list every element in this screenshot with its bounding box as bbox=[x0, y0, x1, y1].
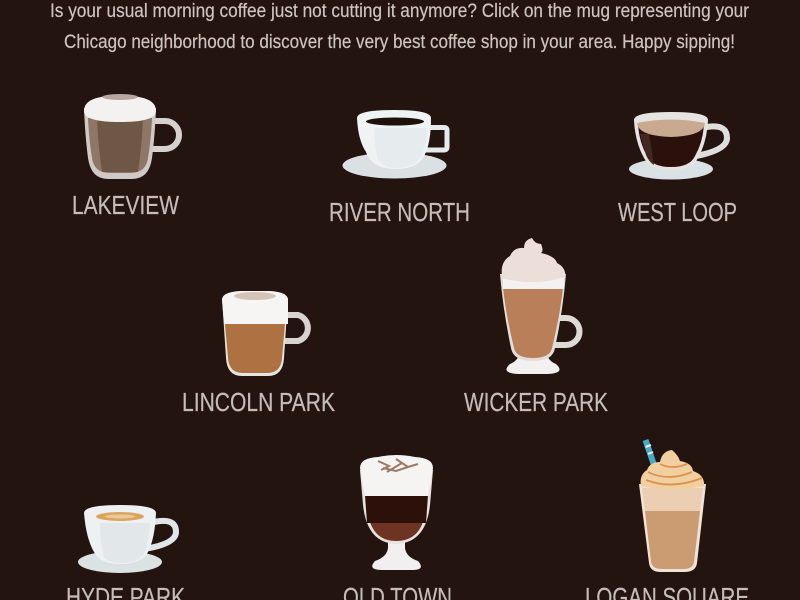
glass bbox=[360, 470, 433, 544]
saucer bbox=[629, 158, 713, 180]
milk layer bbox=[642, 488, 703, 511]
foam bbox=[84, 94, 156, 122]
crema bbox=[637, 120, 705, 137]
cup bbox=[357, 110, 431, 169]
stem and foot bbox=[372, 538, 421, 570]
coffee bbox=[638, 124, 704, 167]
glass bbox=[634, 112, 708, 170]
chocolate drizzle bbox=[378, 459, 418, 472]
saucer bbox=[78, 551, 162, 573]
whipped cream with caramel bbox=[641, 450, 704, 490]
whipped cream bbox=[502, 238, 565, 284]
foam bbox=[222, 291, 288, 324]
dark coffee bbox=[365, 495, 428, 541]
mug: Logan Square bbox=[639, 440, 706, 572]
handle bbox=[553, 318, 580, 345]
saucer bbox=[342, 152, 446, 178]
glass bbox=[500, 274, 566, 361]
foam bbox=[360, 455, 433, 496]
handle bbox=[420, 128, 447, 150]
label: Lakeview: LAKEVIEW bbox=[72, 192, 179, 220]
coffee bbox=[503, 288, 563, 358]
handle bbox=[282, 315, 308, 341]
mug: River North bbox=[342, 110, 447, 178]
cocoa dust bbox=[102, 94, 138, 100]
label: Lincoln Park: LINCOLN PARK bbox=[182, 389, 335, 417]
caramel swirls bbox=[646, 464, 702, 485]
coffee bbox=[88, 118, 152, 173]
cup bbox=[84, 505, 156, 564]
coffee bbox=[645, 511, 700, 569]
cocoa dust bbox=[234, 292, 276, 300]
label: Wicker Park: WICKER PARK bbox=[464, 389, 608, 417]
label: West Loop: WEST LOOP bbox=[618, 199, 737, 227]
foot bbox=[506, 352, 560, 374]
glass bbox=[84, 108, 156, 179]
coffee bbox=[366, 118, 424, 126]
label: River North: RIVER NORTH bbox=[329, 199, 470, 227]
mug: Hyde Park bbox=[78, 505, 176, 573]
mug: West Loop bbox=[629, 112, 727, 180]
mug: Lakeview bbox=[84, 94, 179, 179]
mug: Lincoln Park bbox=[222, 291, 308, 376]
mug: Old Town bbox=[360, 455, 433, 570]
straw bbox=[646, 440, 654, 465]
intro text bbox=[50, 0, 749, 53]
handle bbox=[144, 521, 176, 549]
mug: Wicker Park bbox=[500, 238, 580, 374]
handle bbox=[696, 126, 727, 156]
handle bbox=[148, 121, 179, 149]
coffee bbox=[96, 512, 144, 521]
coffee bbox=[225, 324, 285, 373]
glass bbox=[222, 298, 288, 376]
glass bbox=[639, 484, 706, 572]
